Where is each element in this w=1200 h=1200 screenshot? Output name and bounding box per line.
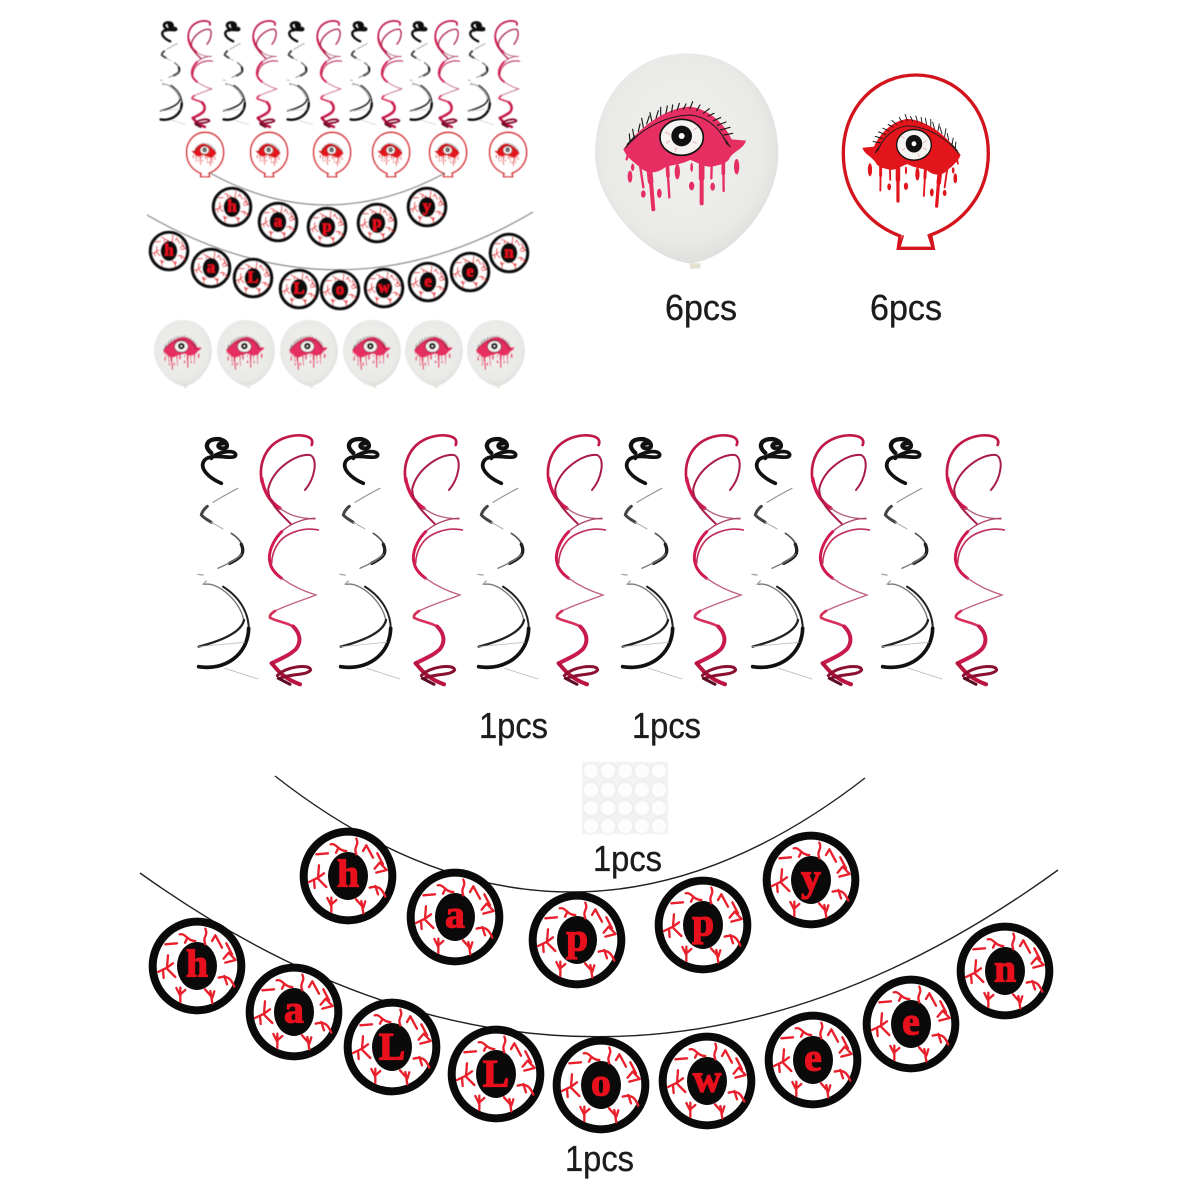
- thumbnail: halloween banner: o: [336, 279, 344, 298]
- icon: adhesive dot sheet: [582, 762, 668, 834]
- thumbnail: halloween banner: n: [504, 242, 514, 261]
- thumbnail: happy banner: p: [322, 216, 332, 235]
- panel: product overview thumbnail: [147, 21, 533, 388]
- thumbnail: happy banner: a: [274, 211, 283, 230]
- banner: halloween: o: [591, 1061, 611, 1105]
- thumbnail: hanging swirls: [160, 21, 520, 127]
- banner: happy: p: [566, 916, 588, 960]
- banner: happy: y: [801, 856, 821, 900]
- banner: halloween: [140, 870, 1058, 1129]
- banner: halloween: h: [186, 942, 208, 986]
- banner: happy: [275, 776, 865, 984]
- thumbnail: halloween banner: w: [378, 277, 390, 296]
- banner: halloween: L: [483, 1052, 509, 1096]
- banner: happy: a: [445, 893, 465, 937]
- banner: happy: p: [692, 901, 714, 945]
- banner: halloween: n: [994, 947, 1016, 991]
- thumbnail: happy banner: h: [227, 196, 237, 215]
- label: second swirl quantity: 1pcs: [632, 705, 701, 746]
- banner: happy: h: [337, 852, 359, 896]
- thumbnail: halloween banner: h: [164, 240, 174, 259]
- banner: halloween: e: [902, 1000, 920, 1044]
- thumbnail: halloween banner: L: [247, 267, 259, 286]
- thumbnail: halloween banner: e: [424, 271, 432, 290]
- thumbnail: halloween banner: [147, 212, 533, 309]
- label: banner quantity: 1pcs: [565, 1138, 634, 1179]
- thumbnail: red outline balloons: [187, 132, 527, 177]
- thumbnail: halloween banner: e: [466, 261, 474, 280]
- panel: hanging swirl decorations: [198, 435, 1004, 684]
- thumbnail: halloween banner: a: [207, 257, 216, 276]
- balloon: latex eyeball balloon: [595, 53, 778, 269]
- label: outline balloon quantity: 6pcs: [870, 287, 942, 328]
- banner: halloween: e: [804, 1036, 822, 1080]
- thumbnail: happy banner: p: [372, 212, 382, 231]
- thumbnail: latex balloons: [154, 320, 525, 388]
- thumbnail: halloween banner: L: [293, 278, 305, 297]
- thumbnail: happy banner: y: [423, 196, 432, 215]
- label: dot sheet quantity: 1pcs: [593, 838, 662, 879]
- banner: halloween: L: [379, 1025, 405, 1069]
- label: first swirl quantity: 1pcs: [479, 705, 548, 746]
- label: latex balloon quantity: 6pcs: [665, 287, 737, 328]
- banner: halloween: w: [693, 1057, 722, 1101]
- balloon: red outline eyeball balloon: [843, 75, 988, 248]
- banner: halloween: a: [284, 988, 304, 1032]
- thumbnail: happy banner: [210, 173, 446, 246]
